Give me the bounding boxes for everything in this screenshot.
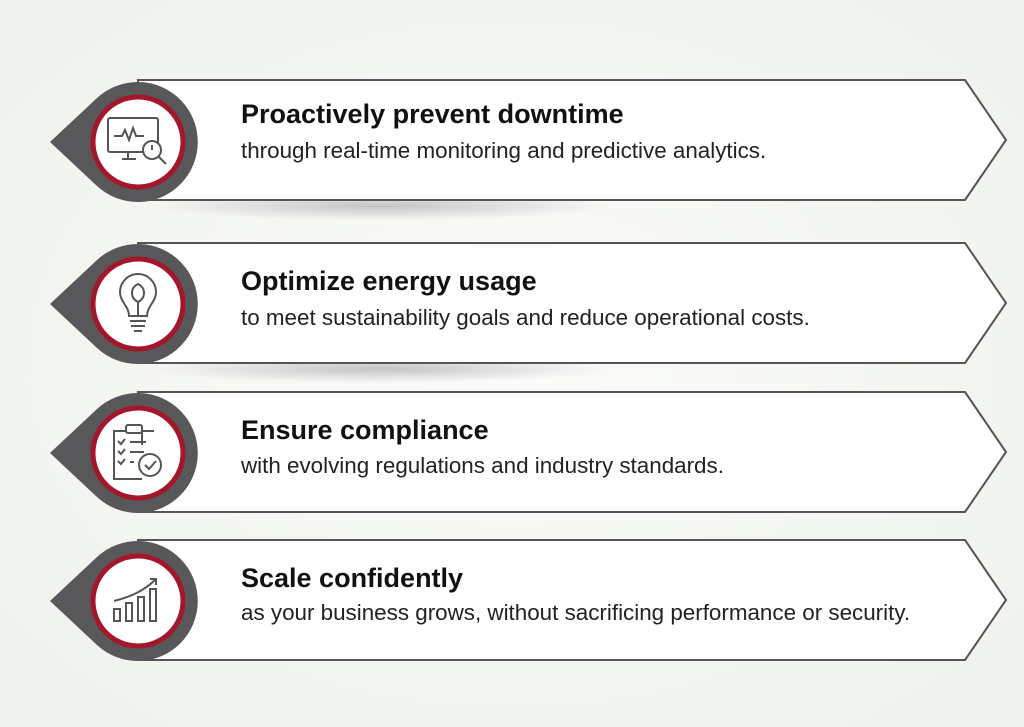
text 2: to meet sustainability goals and reduce operational costs. <box>241 305 810 330</box>
title 2: Optimize energy usage <box>241 266 537 296</box>
icon: monitor with alert <box>108 118 166 164</box>
title 1: Proactively prevent downtime <box>241 99 624 129</box>
title 3: Ensure compliance <box>241 415 489 445</box>
teardrop badge 2 <box>50 244 198 364</box>
icon: lightbulb leaf <box>120 274 156 331</box>
text 4: as your business grows, without sacrificing performance or security. <box>241 600 910 625</box>
row 4: scale <box>50 540 1006 661</box>
text 1: through real-time monitoring and predictive analytics. <box>241 138 766 163</box>
teardrop badge 4 <box>50 541 198 661</box>
row 1: downtime <box>50 80 1006 202</box>
icon: clipboard check <box>114 425 161 479</box>
teardrop badge 1 <box>50 82 198 202</box>
row 3: compliance <box>50 392 1006 513</box>
text 3: with evolving regulations and industry standards. <box>240 453 724 478</box>
title 4: Scale confidently <box>241 563 463 593</box>
teardrop badge 3 <box>50 393 198 513</box>
icon: growth bars <box>114 579 156 621</box>
row 2: energy <box>50 243 1006 364</box>
